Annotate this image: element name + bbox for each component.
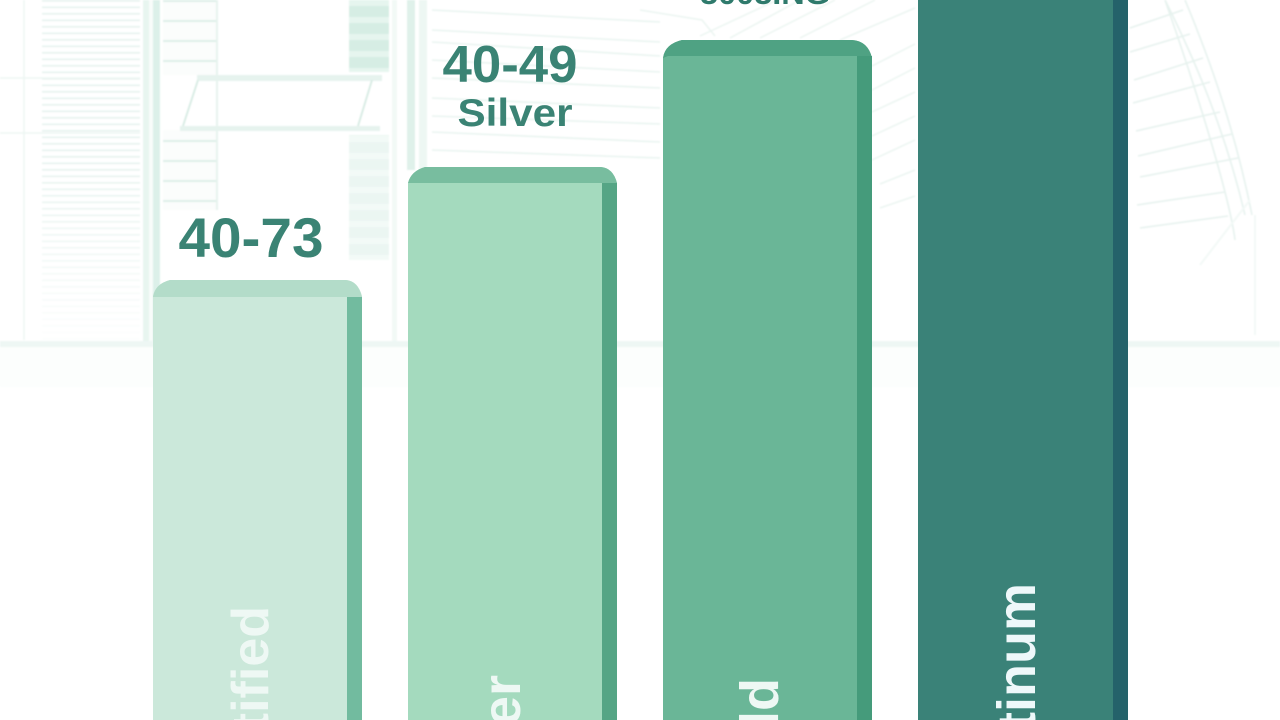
bar: Silver: [408, 167, 617, 720]
bar: Platinum: [918, 0, 1128, 720]
central window with louvers and awning: [163, 0, 427, 345]
value: 40-73: 40-73: [178, 206, 324, 269]
right curved roof structure: [1130, 0, 1252, 240]
bar: Gold: [663, 40, 872, 720]
central slatted facade lines: [432, 10, 660, 158]
bar: Certified: [153, 280, 362, 720]
value and name: 40-49 Silver: Silver: [458, 92, 572, 135]
value and name: 40-49 Silver: 40-49: [442, 36, 578, 94]
left louvered facade: [0, 0, 160, 345]
value and name: 40-49 Silver: [442, 36, 578, 135]
ground line: [0, 341, 1280, 347]
